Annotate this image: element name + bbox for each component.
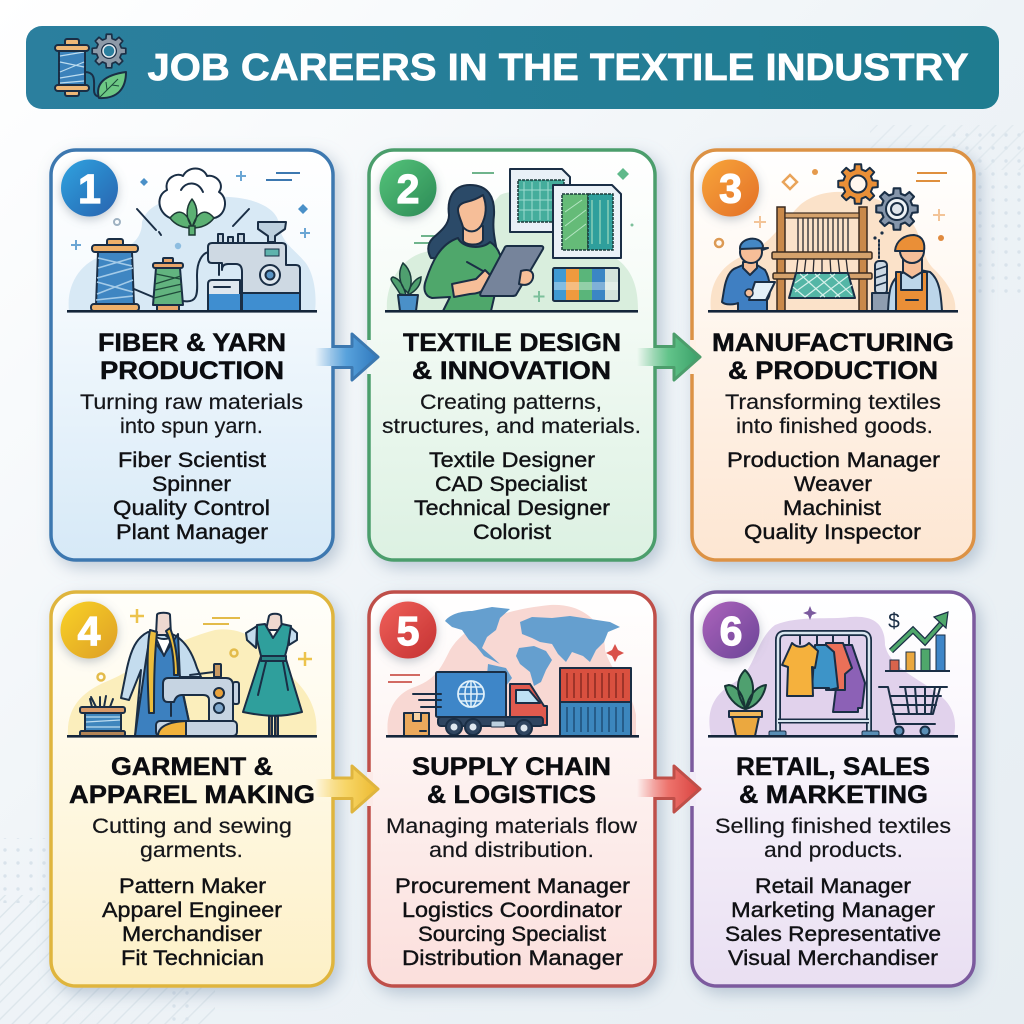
- description: [80, 391, 303, 438]
- description: [382, 391, 641, 438]
- heading: GARMENT &: [111, 753, 273, 781]
- heading: TEXTILE DESIGN: [403, 329, 621, 357]
- job list: [395, 875, 630, 970]
- number badge 4: 4: [78, 608, 101, 654]
- description: structures, and materials.: [382, 415, 641, 438]
- icon: large blue spool: [91, 239, 139, 311]
- number badge 1: [61, 160, 118, 216]
- icon: orange gear: [838, 164, 878, 204]
- icon: mannequin with jacket and tape: [121, 613, 201, 736]
- job list: Technical Designer: [414, 497, 610, 520]
- icon: stacked shipping containers: [560, 668, 631, 736]
- icon: sewing machine: [156, 664, 239, 736]
- number badge 6: [702, 602, 760, 658]
- panel 6: retail, sales and marketing: [692, 592, 974, 986]
- description: [715, 815, 951, 862]
- heading: MANUFACTURING: [712, 329, 954, 357]
- job list: [725, 875, 941, 970]
- description: Turning raw materials: [80, 391, 303, 414]
- heading: & INNOVATION: [412, 357, 611, 385]
- icon: spool, gear and leaf: [55, 34, 126, 98]
- illustration: loom, gears and workers: [708, 164, 958, 313]
- icon: growth chart and dollar: $: [888, 610, 900, 633]
- icon: teal dress on stand: [243, 614, 302, 736]
- number badge 3: 3: [719, 166, 742, 212]
- job list: Production Manager: [727, 449, 940, 472]
- job list: Plant Manager: [116, 521, 268, 544]
- job list: Merchandiser: [122, 923, 262, 946]
- title: JOB CAREERS IN THE TEXTILE INDUSTRY: [148, 47, 969, 89]
- arrow: panel 1 to panel 2: [315, 334, 378, 380]
- job list: Sourcing Specialist: [418, 923, 606, 946]
- description: and products.: [764, 839, 903, 862]
- job list: Pattern Maker: [119, 875, 266, 898]
- description: [92, 815, 292, 862]
- icon: growth chart and dollar: [885, 610, 950, 671]
- heading: [69, 753, 315, 809]
- icon: clothing rack: [769, 633, 879, 736]
- description: Selling finished textiles: [715, 815, 951, 838]
- icon: cotton boll: [159, 168, 225, 235]
- heading: SUPPLY CHAIN: [412, 753, 611, 781]
- description: into spun yarn.: [120, 415, 263, 438]
- header banner: [26, 26, 999, 109]
- number badge 2: [380, 160, 436, 216]
- icon: thread spool with needles: [80, 696, 125, 736]
- icon: grey gear: [876, 188, 918, 230]
- job list: Logistics Coordinator: [402, 899, 622, 922]
- heading: & LOGISTICS: [427, 781, 596, 809]
- description: Transforming textiles: [725, 391, 941, 414]
- job list: Distribution Manager: [402, 947, 623, 970]
- panel 5: supply chain and logistics: [369, 592, 655, 986]
- job list: Textile Designer: [429, 449, 595, 472]
- panel 3: manufacturing and production: [692, 150, 974, 560]
- job list: Marketing Manager: [731, 899, 935, 922]
- number badge 5: 5: [397, 608, 419, 654]
- job list: Machinist: [783, 497, 881, 520]
- job list: [102, 875, 282, 970]
- arrow: panel 4 to panel 5: [315, 766, 378, 812]
- heading: APPAREL MAKING: [69, 781, 315, 809]
- number badge 5: [380, 602, 436, 658]
- heading: [412, 753, 611, 809]
- description: garments.: [140, 839, 243, 862]
- number badge 2: 2: [397, 166, 419, 212]
- job list: Colorist: [473, 521, 551, 544]
- description: and distribution.: [429, 839, 594, 862]
- heading: [712, 329, 954, 385]
- illustration: designer with tablet and fabric swatches: [385, 168, 638, 313]
- heading: & PRODUCTION: [728, 357, 938, 385]
- world map: [445, 607, 620, 705]
- job list: [727, 449, 940, 544]
- icon: designer figure: [424, 185, 543, 311]
- job list: Fiber Scientist: [118, 449, 266, 472]
- job list: Fit Technician: [121, 947, 264, 970]
- heading: RETAIL, SALES: [736, 753, 930, 781]
- number badge 3: [702, 160, 759, 216]
- icon: shipping box: [404, 713, 429, 736]
- heading: PRODUCTION: [100, 357, 284, 385]
- job list: Sales Representative: [725, 923, 941, 946]
- icon: delivery truck: [413, 672, 547, 736]
- icon: small green spool: [134, 252, 209, 311]
- number badge 1: 1: [78, 166, 101, 212]
- illustration: clothing rack, plant, chart and cart: [708, 606, 958, 738]
- job list: Procurement Manager: [395, 875, 630, 898]
- heading: [403, 329, 621, 385]
- job list: Quality Inspector: [744, 521, 921, 544]
- heading: [736, 753, 930, 809]
- icon: worker with clipboard: [722, 239, 775, 311]
- arrow: panel 2 to panel 3: [637, 334, 700, 380]
- illustration: world map, truck and containers: [386, 605, 639, 738]
- description: Cutting and sewing: [92, 815, 292, 838]
- job list: Visual Merchandiser: [728, 947, 938, 970]
- icon: colour swatch strip: [553, 268, 619, 301]
- icon: industrial sewing machine: [208, 222, 300, 311]
- job list: [414, 449, 610, 544]
- heading: FIBER & YARN: [98, 329, 286, 357]
- job list: Weaver: [794, 473, 872, 496]
- panel 2: textile design and innovation: [369, 150, 655, 560]
- icon: fabric sample sheets: [510, 169, 621, 258]
- arrow: panel 5 to panel 6: [637, 766, 700, 812]
- description: [725, 391, 941, 438]
- illustration: mannequin, sewing machine and dress: [67, 609, 317, 738]
- icon: shopping cart: [879, 687, 947, 736]
- icon: potted plant: [725, 670, 766, 736]
- icon: potted plant: [391, 263, 421, 311]
- panel 1: fiber and yarn production: [51, 150, 333, 560]
- job list: Apparel Engineer: [102, 899, 282, 922]
- job list: Retail Manager: [755, 875, 911, 898]
- description: [386, 815, 638, 862]
- description: into finished goods.: [736, 415, 933, 438]
- icon: worker in overalls: [888, 235, 942, 311]
- illustration: cotton, spools and machine: [67, 168, 317, 313]
- heading: [98, 329, 286, 385]
- job list: [113, 449, 270, 544]
- icon: machine spindle: [872, 231, 890, 311]
- job list: Quality Control: [113, 497, 270, 520]
- description: Creating patterns,: [420, 391, 602, 414]
- job list: Spinner: [152, 473, 231, 496]
- number badge 6: 6: [720, 608, 742, 654]
- heading: & MARKETING: [739, 781, 928, 809]
- job list: CAD Specialist: [435, 473, 587, 496]
- number badge 4: [60, 602, 118, 658]
- icon: weaving loom: [772, 207, 872, 311]
- description: Managing materials flow: [386, 815, 638, 838]
- panel 4: garment and apparel making: [51, 592, 333, 986]
